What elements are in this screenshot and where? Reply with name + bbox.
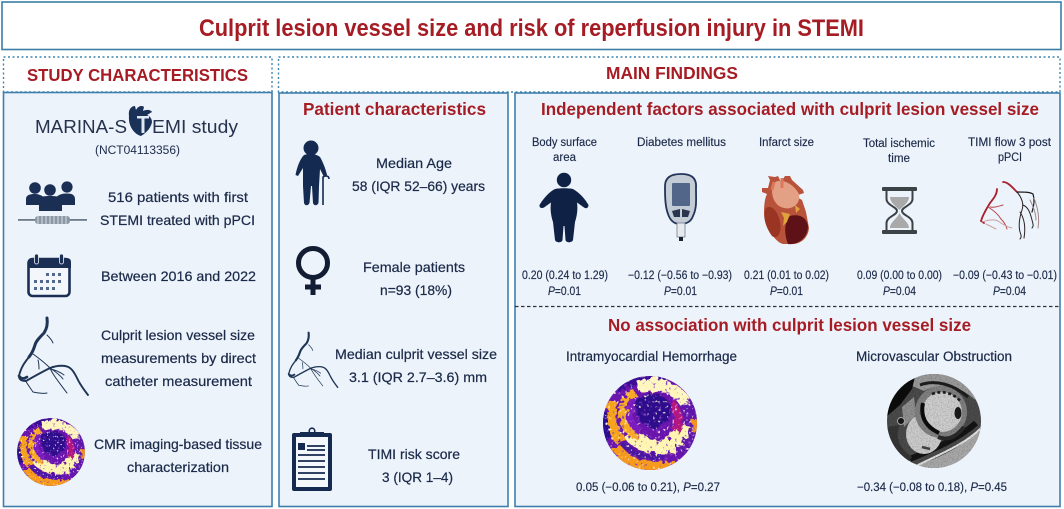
panel: patient characteristics — [279, 93, 508, 506]
icon: female symbol — [298, 248, 328, 295]
heading: no association: No association with culprit lesion vessel size — [608, 315, 971, 335]
factor: body surface area: area — [553, 152, 577, 164]
text: vessel size measurement — [101, 327, 256, 389]
icon: clipboard — [294, 428, 330, 489]
text: median culprit vessel size: 3.1 (IQR 2.7–3.6) mm — [349, 369, 487, 385]
text: TIMI risk score: TIMI risk score — [368, 446, 460, 462]
icon: coronary vessel — [19, 318, 88, 395]
title banner: Culprit lesion vessel size and risk of reperfusion injury in STEMI — [199, 15, 864, 42]
factor: total ischemic time: P=0.04 — [883, 286, 917, 298]
image: CMR tissue map — [16, 417, 86, 487]
text: CMR characterization — [94, 436, 262, 475]
factor: total ischemic time — [857, 138, 942, 298]
factor: diabetes mellitus — [628, 137, 732, 298]
factor: infarct size: P=0.01 — [770, 286, 803, 298]
icon: coronary angiogram — [981, 182, 1039, 239]
icon: glucose meter — [665, 174, 696, 241]
text: female patients — [363, 259, 465, 298]
factor: diabetes mellitus: −0.12 (−0.56 to −0.93) — [628, 270, 732, 282]
section header: study characteristics: STUDY CHARACTERISTICS — [27, 65, 248, 85]
text: CMR characterization: characterization — [127, 459, 229, 475]
text: median culprit vessel size — [335, 346, 497, 385]
text: median age: Median Age — [376, 155, 452, 171]
factor: total ischemic time: Total ischemic — [863, 138, 935, 150]
study logo: MARINA-STEMI — [35, 106, 239, 157]
finding: intramyocardial hemorrhage — [566, 349, 737, 494]
finding: intramyocardial hemorrhage: Intramyocardial Hemorrhage — [566, 349, 737, 364]
panel: findings — [515, 93, 1060, 506]
factor: body surface area: P=0.01 — [548, 286, 581, 298]
text: TIMI risk score — [368, 446, 460, 485]
finding: microvascular obstruction: Microvascular Obstruction — [856, 349, 1012, 364]
text: TIMI risk score: 3 (IQR 1–4) — [382, 469, 453, 485]
factor: body surface area — [522, 137, 608, 298]
text: vessel size measurement: catheter measurement — [105, 373, 252, 389]
factor: TIMI flow 3 post pPCI — [953, 137, 1057, 298]
factor: TIMI flow 3 post pPCI: TIMI flow 3 post — [968, 137, 1052, 149]
text: median age — [352, 155, 485, 194]
finding: microvascular obstruction: −0.34 (−0.08 to 0.18), P=0.45 — [857, 482, 1007, 494]
text: study period: Between 2016 and 2022 — [101, 268, 256, 284]
study logo: MARINA-STEMI: (NCT04113356) — [95, 145, 180, 157]
image: hemorrhage map — [602, 375, 698, 471]
factor: infarct size: Infarct size — [759, 137, 814, 149]
finding: microvascular obstruction — [856, 349, 1012, 494]
study logo: MARINA-STEMI: MARINA-S — [35, 116, 127, 137]
study logo: MARINA-STEMI: EMI study — [152, 116, 239, 137]
text: female patients: n=93 (18%) — [380, 282, 452, 298]
section header: main findings — [278, 57, 1060, 92]
factor: total ischemic time: time — [888, 153, 910, 165]
icon: obese person — [539, 173, 588, 242]
icon: coronary vessel — [289, 333, 338, 387]
text: patients — [100, 189, 255, 228]
heading: independent factors: Independent factors associated with culprit lesion vessel size — [541, 99, 1039, 119]
section header: study characteristics — [4, 57, 272, 92]
text: median age: 58 (IQR 52–66) years — [352, 178, 485, 194]
icon: patients group with stent — [18, 181, 87, 224]
factor: infarct size: 0.21 (0.01 to 0.02) — [744, 270, 829, 282]
factor: body surface area: Body surface — [532, 137, 597, 149]
factor: total ischemic time: 0.09 (0.00 to 0.00) — [857, 270, 942, 282]
text: female patients: Female patients — [363, 259, 465, 275]
factor: TIMI flow 3 post pPCI: P=0.04 — [993, 286, 1027, 298]
text: patients: 516 patients with first — [108, 189, 248, 205]
factor: diabetes mellitus: P=0.01 — [664, 286, 697, 298]
text: median culprit vessel size: Median culprit vessel size — [335, 346, 497, 362]
icon: calendar — [28, 254, 71, 296]
heading: patient characteristics: Patient characteristics — [303, 99, 486, 119]
text: vessel size measurement: Culprit lesion vessel size — [101, 327, 255, 343]
section header: main findings: MAIN FINDINGS — [606, 63, 738, 83]
image: MRI short-axis — [886, 373, 982, 469]
finding: intramyocardial hemorrhage: 0.05 (−0.06 to 0.21), P=0.27 — [576, 482, 720, 494]
text: patients: STEMI treated with pPCI — [100, 212, 255, 228]
icon: hourglass — [882, 187, 917, 234]
text: vessel size measurement: measurements by direct — [101, 350, 256, 366]
icon: elderly person — [296, 140, 329, 205]
icon: heart — [762, 176, 809, 244]
factor: TIMI flow 3 post pPCI: −0.09 (−0.43 to −0.01) — [953, 270, 1057, 282]
factor: TIMI flow 3 post pPCI: pPCI — [998, 152, 1022, 164]
factor: diabetes mellitus: Diabetes mellitus — [637, 137, 726, 149]
panel: study characteristics — [4, 92, 272, 506]
title banner — [2, 2, 1061, 50]
factor: infarct size — [744, 137, 829, 298]
text: CMR characterization: CMR imaging-based tissue — [94, 436, 262, 452]
factor: body surface area: 0.20 (0.24 to 1.29) — [522, 270, 608, 282]
